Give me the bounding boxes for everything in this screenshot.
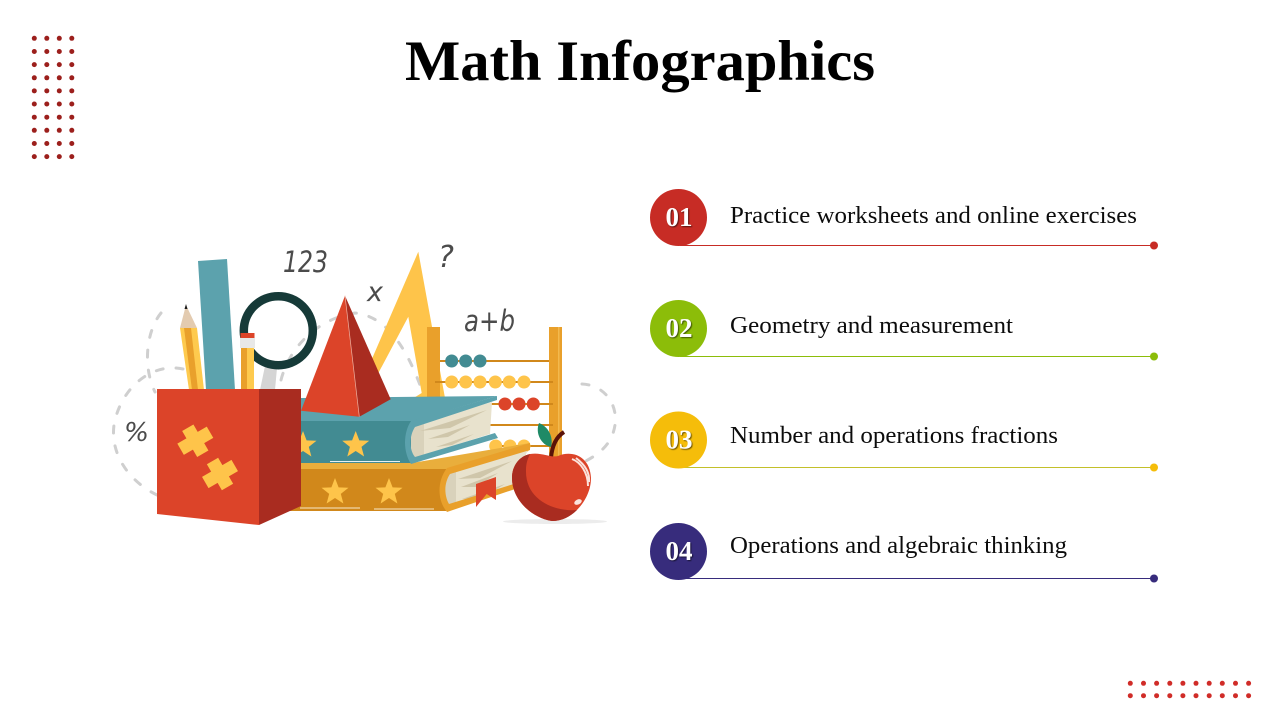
list item 3: [650, 412, 1158, 472]
pencil cup: [157, 389, 301, 525]
handwritten labels: a+b: [464, 304, 515, 338]
list item 4: Operations and algebraic thinking: [730, 533, 1067, 559]
list item 1: 01: [666, 202, 692, 232]
list item 3: Number and operations fractions: [730, 423, 1058, 449]
title: Math Infographics: [405, 30, 875, 93]
yellow set square: [355, 252, 445, 399]
ruler: [198, 259, 235, 390]
pencil left: [180, 304, 204, 390]
list item 2: Geometry and measurement: [730, 313, 1013, 339]
pencil right: [240, 333, 255, 390]
dashed swirl lines: [113, 313, 615, 495]
handwritten labels: [124, 240, 515, 448]
list item 4: 04: [666, 536, 692, 566]
orange book: [288, 443, 530, 512]
handwritten labels: x: [366, 277, 384, 308]
list item 3: 03: [666, 424, 692, 454]
abacus: [427, 327, 562, 457]
handwritten labels: ?: [438, 240, 454, 275]
list item 1: Practice worksheets and online exercises: [730, 203, 1137, 229]
dot pattern: bottom right: [1128, 681, 1251, 698]
handwritten labels: %: [124, 418, 149, 448]
list item 2: [650, 300, 1158, 360]
list item 4: [650, 523, 1158, 582]
illustration: math objects: [113, 240, 615, 525]
handwritten labels: 123: [283, 245, 328, 279]
apple: [503, 423, 607, 524]
magnifying glass: [244, 296, 313, 390]
list item 1: [650, 189, 1158, 250]
list item 2: 02: [666, 313, 692, 343]
teal book: [290, 396, 498, 464]
bookmark: [476, 477, 496, 507]
dot pattern: top left: [32, 36, 74, 159]
pyramid: [301, 296, 391, 417]
